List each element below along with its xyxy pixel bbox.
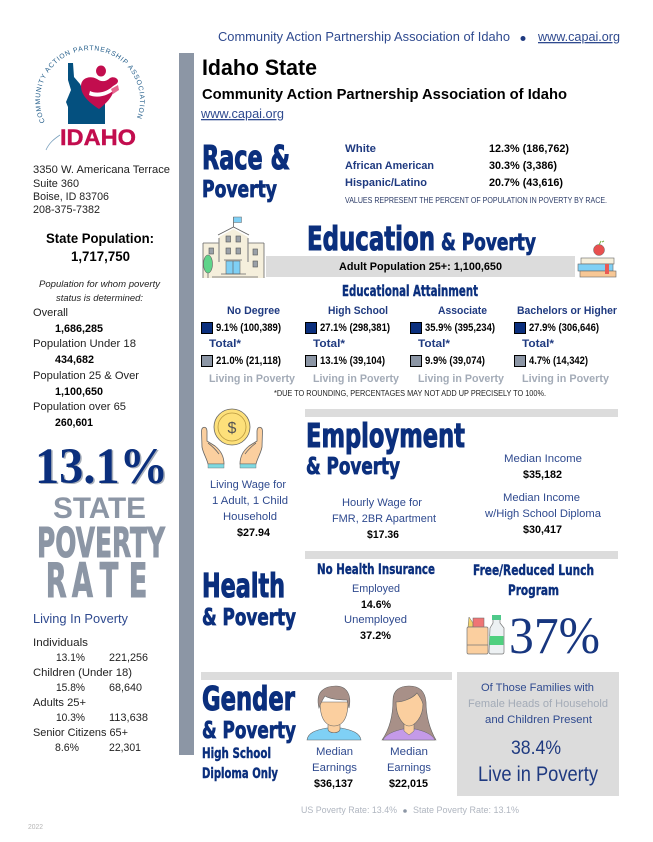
icon: groceries [467,615,504,654]
logo: Community Action Partnership Association of Idaho: IDAHO [60,125,136,150]
educational attainment table [202,282,618,398]
panel: left sidebar [33,46,170,754]
living in poverty table: 8.6% [55,742,79,754]
state poverty rate callout [35,439,170,609]
stat: hourly wage [332,497,436,541]
title block: Idaho State [202,55,317,80]
stat: living wage: $27.94 [237,527,271,539]
column: high school: Living in Poverty [313,373,400,385]
column: high school: 27.1% (298,381) [320,322,390,334]
stat: male earnings: Earnings [312,762,358,774]
address: Boise, ID 83706 [33,191,109,203]
icon: woman [382,686,436,740]
icon: hands holding coin [202,409,262,468]
no health insurance [317,562,435,642]
stat: living wage: Household [223,511,277,523]
column: bachelors or higher: 4.7% (14,342) [529,355,588,367]
stat: hourly wage: FMR, 2BR Apartment [332,513,436,525]
state poverty rate callout: 13.1% [36,440,170,496]
heading: gender and poverty: High School [202,746,271,762]
educational attainment table: Educational Attainment [342,282,478,300]
state poverty rate callout: 13.1% [35,439,168,495]
state poverty rate callout: POVERTY [37,519,166,567]
stat: median income: w/High School Diploma [484,508,602,520]
living in poverty table: 221,256 [109,652,148,664]
free and reduced lunch [467,563,600,665]
column: no degree: Total* [209,338,242,350]
population for whom poverty status is determined: 1,100,650 [55,386,103,398]
population for whom poverty status is determined: Population Under 18 [33,338,136,350]
educational attainment table: *DUE TO ROUNDING, PERCENTAGES MAY NOT ADD UP PRECISELY TO 100%. [274,389,546,398]
column: no degree: No Degree [227,305,280,317]
callout: female heads of household: and Children Present [485,714,592,726]
column: associate: Associate [438,305,487,317]
footer rates: US Poverty Rate: 13.4% [301,805,397,815]
callout: female heads of household: Female Heads of Household [468,698,608,710]
population for whom poverty status is determined: Population for whom poverty [39,279,161,289]
race table: 20.7% (43,616) [489,177,563,189]
column: associate: Total* [418,338,451,350]
stat: median income: $35,182 [523,469,562,481]
no health insurance: 37.2% [360,630,391,642]
heading: gender and poverty: Gender [202,679,295,718]
heading: race and poverty [202,138,290,203]
living in poverty table: Individuals [33,637,89,649]
stat: hourly wage: Hourly Wage for [342,497,422,509]
callout: female heads of household: 38.4% [511,738,561,759]
column: bachelors or higher: Living in Poverty [522,373,610,385]
race table: VALUES REPRESENT THE PERCENT OF POPULATION IN POVERTY BY RACE. [345,196,607,205]
living in poverty table: 68,640 [109,682,142,694]
race table: 30.3% (3,386) [489,160,557,172]
living in poverty table: Living In Poverty [33,612,129,626]
heading: gender and poverty: Diploma Only [202,766,278,782]
callout: female heads of household: Of Those Families with [481,682,594,694]
state population [46,231,154,264]
column: high school: 13.1% (39,104) [320,355,385,367]
vertical grey bar [179,53,194,755]
race table: 12.3% (186,762) [489,143,569,155]
state poverty rate callout: STATE [53,492,146,525]
column: associate: 35.9% (395,234) [425,322,495,334]
title block: Community Action Partnership Association of Idaho [202,86,567,103]
icon: school building [203,217,264,278]
header line: Community Action Partnership Association of Idaho [218,29,510,44]
callout: female heads of household [457,672,619,796]
heading: health and poverty [202,566,296,631]
heading: gender and poverty [202,679,296,782]
stat: median income [484,453,602,536]
stat: female earnings [387,746,431,790]
stat: male earnings [312,746,358,790]
stat: hourly wage: $17.36 [367,529,399,541]
living in poverty table: 113,638 [109,712,148,724]
state poverty rate callout: RATE [46,554,147,609]
column: high school: High School [328,305,388,317]
panel: gender and poverty [201,672,619,796]
free and reduced lunch: Program [508,583,559,599]
no health insurance: 14.6% [361,599,391,611]
stat: living wage: 1 Adult, 1 Child [212,495,288,507]
no health insurance: Employed [352,583,400,595]
address: 3350 W. Americana Terrace [33,164,170,176]
title block: www.capai.org [200,106,284,121]
heading: education and poverty: & Poverty [441,230,536,256]
stat: female earnings: Median [390,746,428,758]
column: bachelors or higher: Total* [522,338,555,350]
state population: 1,717,750 [71,249,130,264]
column: no degree: 21.0% (21,118) [216,355,281,367]
heading: employment and poverty: Employment [306,416,465,455]
living in poverty table: 13.1% [56,652,85,664]
free and reduced lunch: 37% [509,608,600,665]
footer rates: State Poverty Rate: 13.1% [413,805,519,815]
living in poverty table: Children (Under 18) [33,667,132,679]
address: 208-375-7382 [33,204,100,216]
heading: health and poverty: & Poverty [202,605,296,631]
stat: female earnings: $22,015 [389,778,428,790]
stat: median income: $30,417 [523,524,562,536]
column: no degree: 9.1% (100,389) [216,322,281,334]
stat: female earnings: Earnings [387,762,431,774]
stat: living wage [210,479,288,539]
living in poverty table: Senior Citizens 65+ [33,727,128,739]
heading: health and poverty: Health [202,566,285,605]
title block [200,55,567,121]
population for whom poverty status is determined: Population 25 & Over [33,370,139,382]
address [33,164,170,216]
race table: Hispanic/Latino [345,177,427,189]
column: associate [410,305,505,385]
adult population band: Adult Population 25+: 1,100,650 [339,261,502,273]
stat: male earnings: Median [316,746,353,758]
living in poverty table: 15.8% [56,682,85,694]
logo: Community Action Partnership Association of Idaho: COMMUNITY ACTION PARTNERSHIP ASSOCIATION [35,46,145,123]
heading: employment and poverty [306,416,465,480]
population for whom poverty status is determined: status is determined: [56,293,143,303]
year: 2022 [28,824,43,831]
living in poverty table [33,612,148,754]
no health insurance: Unemployed [344,614,407,626]
header line: www.capai.org [537,29,620,44]
column: no degree [202,305,296,385]
free and reduced lunch: Free/Reduced Lunch [473,563,594,579]
population for whom poverty status is determined: Population over 65 [33,401,126,413]
panel: education and poverty [202,217,618,398]
population for whom poverty status is determined: Overall [33,307,68,319]
population for whom poverty status is determined: 260,601 [55,417,93,429]
footer rates [301,805,519,815]
stat: median income: Median Income [504,453,582,465]
population for whom poverty status is determined: 1,686,285 [55,323,103,335]
column: bachelors or higher: Bachelors or Higher [517,305,618,317]
heading: education and poverty: Education [307,219,435,258]
callout: female heads of household: Live in Poverty [478,762,598,786]
race table: White [345,143,376,155]
column: high school [306,305,400,385]
population for whom poverty status is determined [33,279,161,429]
race table [345,143,607,205]
no health insurance: No Health Insurance [317,562,435,578]
panel: race and poverty [202,138,607,205]
icon: books and apple [578,241,616,277]
living in poverty table: 22,301 [109,742,141,754]
panel: health and poverty [202,551,618,665]
column: associate: Living in Poverty [418,373,505,385]
column: bachelors or higher: 27.9% (306,646) [529,322,599,334]
living in poverty table: Adults 25+ [33,697,86,709]
adult population band [266,256,575,277]
icon: man [307,686,361,740]
population for whom poverty status is determined: 434,682 [55,354,94,366]
stat: median income: Median Income [503,492,580,504]
column: no degree: Living in Poverty [209,373,296,385]
stat: living wage: Living Wage for [210,479,286,491]
race table: African American [345,160,434,172]
panel: employment and poverty [202,409,618,541]
living in poverty table: 10.3% [56,712,85,724]
column: bachelors or higher [514,305,618,385]
stat: male earnings: $36,137 [314,778,353,790]
heading: employment and poverty: & Poverty [306,454,400,480]
state population: State Population: [46,231,154,246]
heading: race and poverty: Poverty [202,177,277,203]
heading: gender and poverty: & Poverty [202,718,296,744]
column: associate: 9.9% (39,074) [425,355,485,367]
column: high school: Total* [313,338,346,350]
address: Suite 360 [33,178,79,190]
icon: hands holding coin: $ [228,420,237,437]
heading: race and poverty: Race & [202,138,290,177]
